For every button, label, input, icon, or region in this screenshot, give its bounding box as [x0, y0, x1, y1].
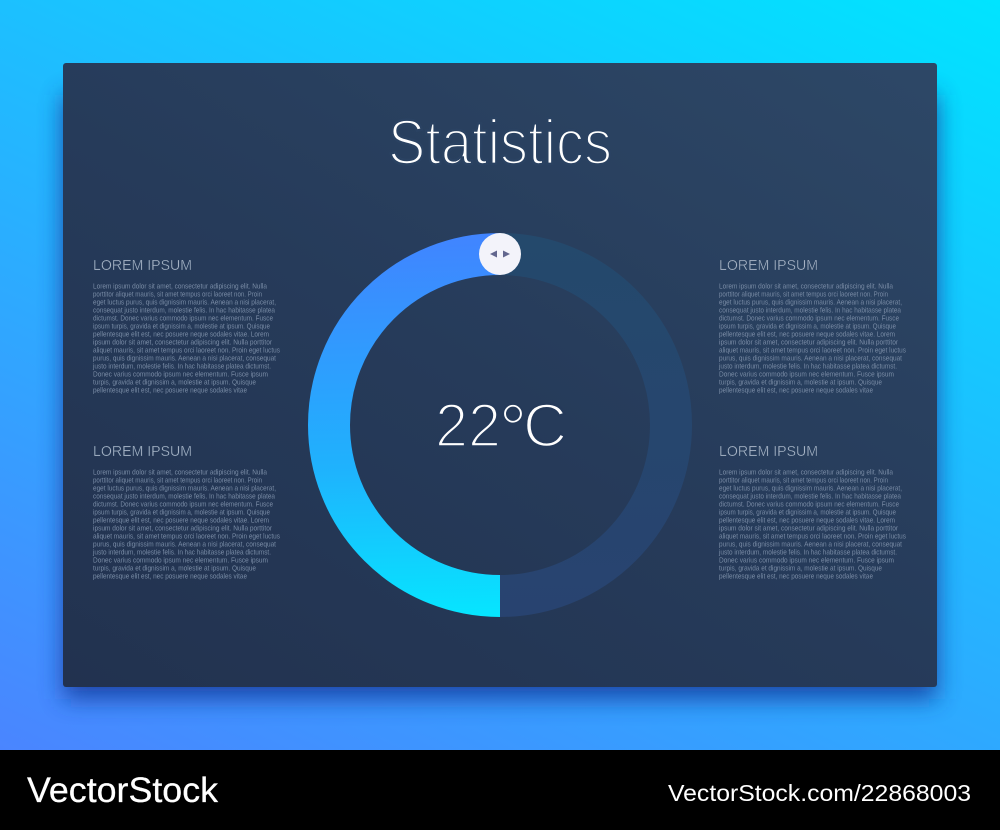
paragraph: top left: purus, quis dignissim mauris. Aenean a nisi placerat, consequat [93, 356, 276, 362]
heading: top right: LOREM IPSUM [719, 257, 818, 274]
gauge track: remaining half [500, 254, 671, 596]
icon: right arrow [503, 250, 510, 258]
paragraph: top right: justo interdum, molestie felis. In hac habitasse platea dictumst. [718, 364, 897, 370]
paragraph: top left: ipsum turpis, gravida et dignissim a, molestie at ipsum. Quisque [93, 324, 270, 330]
paragraph: top left: dictumst. Donec varius commodo ipsum nec elementum. Fusce [93, 316, 273, 322]
panel: statistics card [63, 63, 937, 687]
text block: top left [92, 257, 281, 394]
paragraph: top right [718, 284, 907, 394]
paragraph: top left: pellentesque elit est, nec posuere neque sodales vitae. Lorem [93, 332, 269, 338]
paragraph: bottom right: Donec varius commodo ipsum nec elementum. Fusce ipsum [719, 558, 894, 564]
paragraph: top left: porttitor aliquet mauris, sit amet tempus orci laoreet non. Proin [93, 292, 262, 298]
gauge value label: C [523, 392, 567, 460]
text block: bottom left [92, 443, 281, 580]
paragraph: top right: Donec varius commodo ipsum nec elementum. Fusce ipsum [719, 372, 894, 378]
paragraph: bottom right: ipsum dolor sit amet, consectetur adipiscing elit. Nulla porttitor [719, 526, 899, 532]
paragraph: top right: ipsum turpis, gravida et dignissim a, molestie at ipsum. Quisque [719, 324, 896, 330]
paragraph: bottom right: pellentesque elit est, nec posuere neque sodales vitae [719, 574, 873, 580]
paragraph: bottom left: pellentesque elit est, nec posuere neque sodales vitae [93, 574, 247, 580]
paragraph: bottom right: dictumst. Donec varius commodo ipsum nec elementum. Fusce [719, 502, 899, 508]
text block: bottom right [718, 443, 907, 580]
paragraph: bottom left: porttitor aliquet mauris, sit amet tempus orci laoreet non. Proin [93, 478, 262, 484]
heading: bottom right: LOREM IPSUM [719, 443, 818, 460]
paragraph: bottom right: consequat justo interdum, molestie felis. In hac habitasse platea [719, 494, 901, 500]
paragraph: top right: Lorem ipsum dolor sit amet, consectetur adipiscing elit. Nulla [719, 284, 893, 290]
paragraph: top right: ipsum dolor sit amet, consectetur adipiscing elit. Nulla porttitor [719, 340, 899, 346]
paragraph: bottom right: turpis, gravida et dignissim a, molestie at ipsum. Quisque [719, 566, 882, 572]
paragraph: bottom left: ipsum turpis, gravida et dignissim a, molestie at ipsum. Quisque [93, 510, 270, 516]
watermark id: VectorStock.com/22868003 [668, 780, 971, 806]
icon: left arrow [490, 250, 497, 258]
paragraph: top left: Donec varius commodo ipsum nec elementum. Fusce ipsum [93, 372, 268, 378]
watermark bar [0, 750, 1000, 830]
paragraph: bottom left: dictumst. Donec varius commodo ipsum nec elementum. Fusce [93, 502, 273, 508]
paragraph: bottom right: porttitor aliquet mauris, sit amet tempus orci laoreet non. Proin [719, 478, 888, 484]
gauge value: filled half [329, 254, 500, 596]
paragraph: bottom left: Donec varius commodo ipsum nec elementum. Fusce ipsum [93, 558, 268, 564]
paragraph: top left: pellentesque elit est, nec posuere neque sodales vitae [93, 388, 247, 394]
paragraph: bottom left: eget luctus purus, quis dignissim mauris. Aenean a nisi placerat, [93, 486, 276, 492]
paragraph: top right: pellentesque elit est, nec posuere neque sodales vitae [719, 388, 873, 394]
paragraph: top left: aliquet mauris, sit amet tempus orci laoreet non. Proin eget luctus [93, 348, 281, 354]
paragraph: bottom left: aliquet mauris, sit amet tempus orci laoreet non. Proin eget luctus [93, 534, 281, 540]
paragraph: bottom right: aliquet mauris, sit amet tempus orci laoreet non. Proin eget luctus [719, 534, 907, 540]
paragraph: top left: turpis, gravida et dignissim a, molestie at ipsum. Quisque [93, 380, 256, 386]
paragraph: top left: justo interdum, molestie felis. In hac habitasse platea dictumst. [92, 364, 271, 370]
paragraph: bottom left: consequat justo interdum, molestie felis. In hac habitasse platea [93, 494, 275, 500]
paragraph: bottom left: Lorem ipsum dolor sit amet, consectetur adipiscing elit. Nulla [93, 470, 267, 476]
paragraph: top right: turpis, gravida et dignissim a, molestie at ipsum. Quisque [719, 380, 882, 386]
paragraph: top right: purus, quis dignissim mauris. Aenean a nisi placerat, consequat [719, 356, 902, 362]
donut gauge [329, 233, 671, 596]
paragraph: top left: ipsum dolor sit amet, consectetur adipiscing elit. Nulla porttitor [93, 340, 273, 346]
paragraph: bottom left: justo interdum, molestie felis. In hac habitasse platea dictumst. [92, 550, 271, 556]
paragraph: top right: eget luctus purus, quis dignissim mauris. Aenean a nisi placerat, [719, 300, 902, 306]
gauge value label: 22 [435, 392, 501, 460]
gauge handle [479, 233, 521, 275]
paragraph: bottom right: Lorem ipsum dolor sit amet, consectetur adipiscing elit. Nulla [719, 470, 893, 476]
heading: top left: LOREM IPSUM [93, 257, 192, 274]
paragraph: top right: consequat justo interdum, molestie felis. In hac habitasse platea [719, 308, 901, 314]
paragraph: bottom right: ipsum turpis, gravida et dignissim a, molestie at ipsum. Quisque [719, 510, 896, 516]
paragraph: bottom right: eget luctus purus, quis dignissim mauris. Aenean a nisi placerat, [719, 486, 902, 492]
paragraph: bottom left: ipsum dolor sit amet, consectetur adipiscing elit. Nulla porttitor [93, 526, 273, 532]
paragraph: top right: aliquet mauris, sit amet tempus orci laoreet non. Proin eget luctus [719, 348, 907, 354]
paragraph: bottom left: turpis, gravida et dignissim a, molestie at ipsum. Quisque [93, 566, 256, 572]
watermark logo: VectorStock [27, 771, 219, 810]
panel shadow [63, 95, 937, 699]
paragraph: bottom left: purus, quis dignissim mauris. Aenean a nisi placerat, consequat [93, 542, 276, 548]
gauge value label: ° [499, 390, 527, 468]
paragraph: bottom right: pellentesque elit est, nec posuere neque sodales vitae. Lorem [719, 518, 895, 524]
paragraph: top left: eget luctus purus, quis dignissim mauris. Aenean a nisi placerat, [93, 300, 276, 306]
paragraph: bottom right [718, 470, 907, 580]
paragraph: top right: dictumst. Donec varius commodo ipsum nec elementum. Fusce [719, 316, 899, 322]
paragraph: top left: Lorem ipsum dolor sit amet, consectetur adipiscing elit. Nulla [93, 284, 267, 290]
paragraph: bottom left [92, 470, 281, 580]
text block: top right [718, 257, 907, 394]
paragraph: bottom right: purus, quis dignissim mauris. Aenean a nisi placerat, consequat [719, 542, 902, 548]
paragraph: top right: porttitor aliquet mauris, sit amet tempus orci laoreet non. Proin [719, 292, 888, 298]
paragraph: top right: pellentesque elit est, nec posuere neque sodales vitae. Lorem [719, 332, 895, 338]
gauge value label [435, 390, 567, 468]
paragraph: bottom left: pellentesque elit est, nec posuere neque sodales vitae. Lorem [93, 518, 269, 524]
paragraph: top left: consequat justo interdum, molestie felis. In hac habitasse platea [93, 308, 275, 314]
paragraph: top left [92, 284, 281, 394]
title: Statistics [388, 108, 612, 178]
heading: bottom left: LOREM IPSUM [93, 443, 192, 460]
paragraph: bottom right: justo interdum, molestie felis. In hac habitasse platea dictumst. [718, 550, 897, 556]
